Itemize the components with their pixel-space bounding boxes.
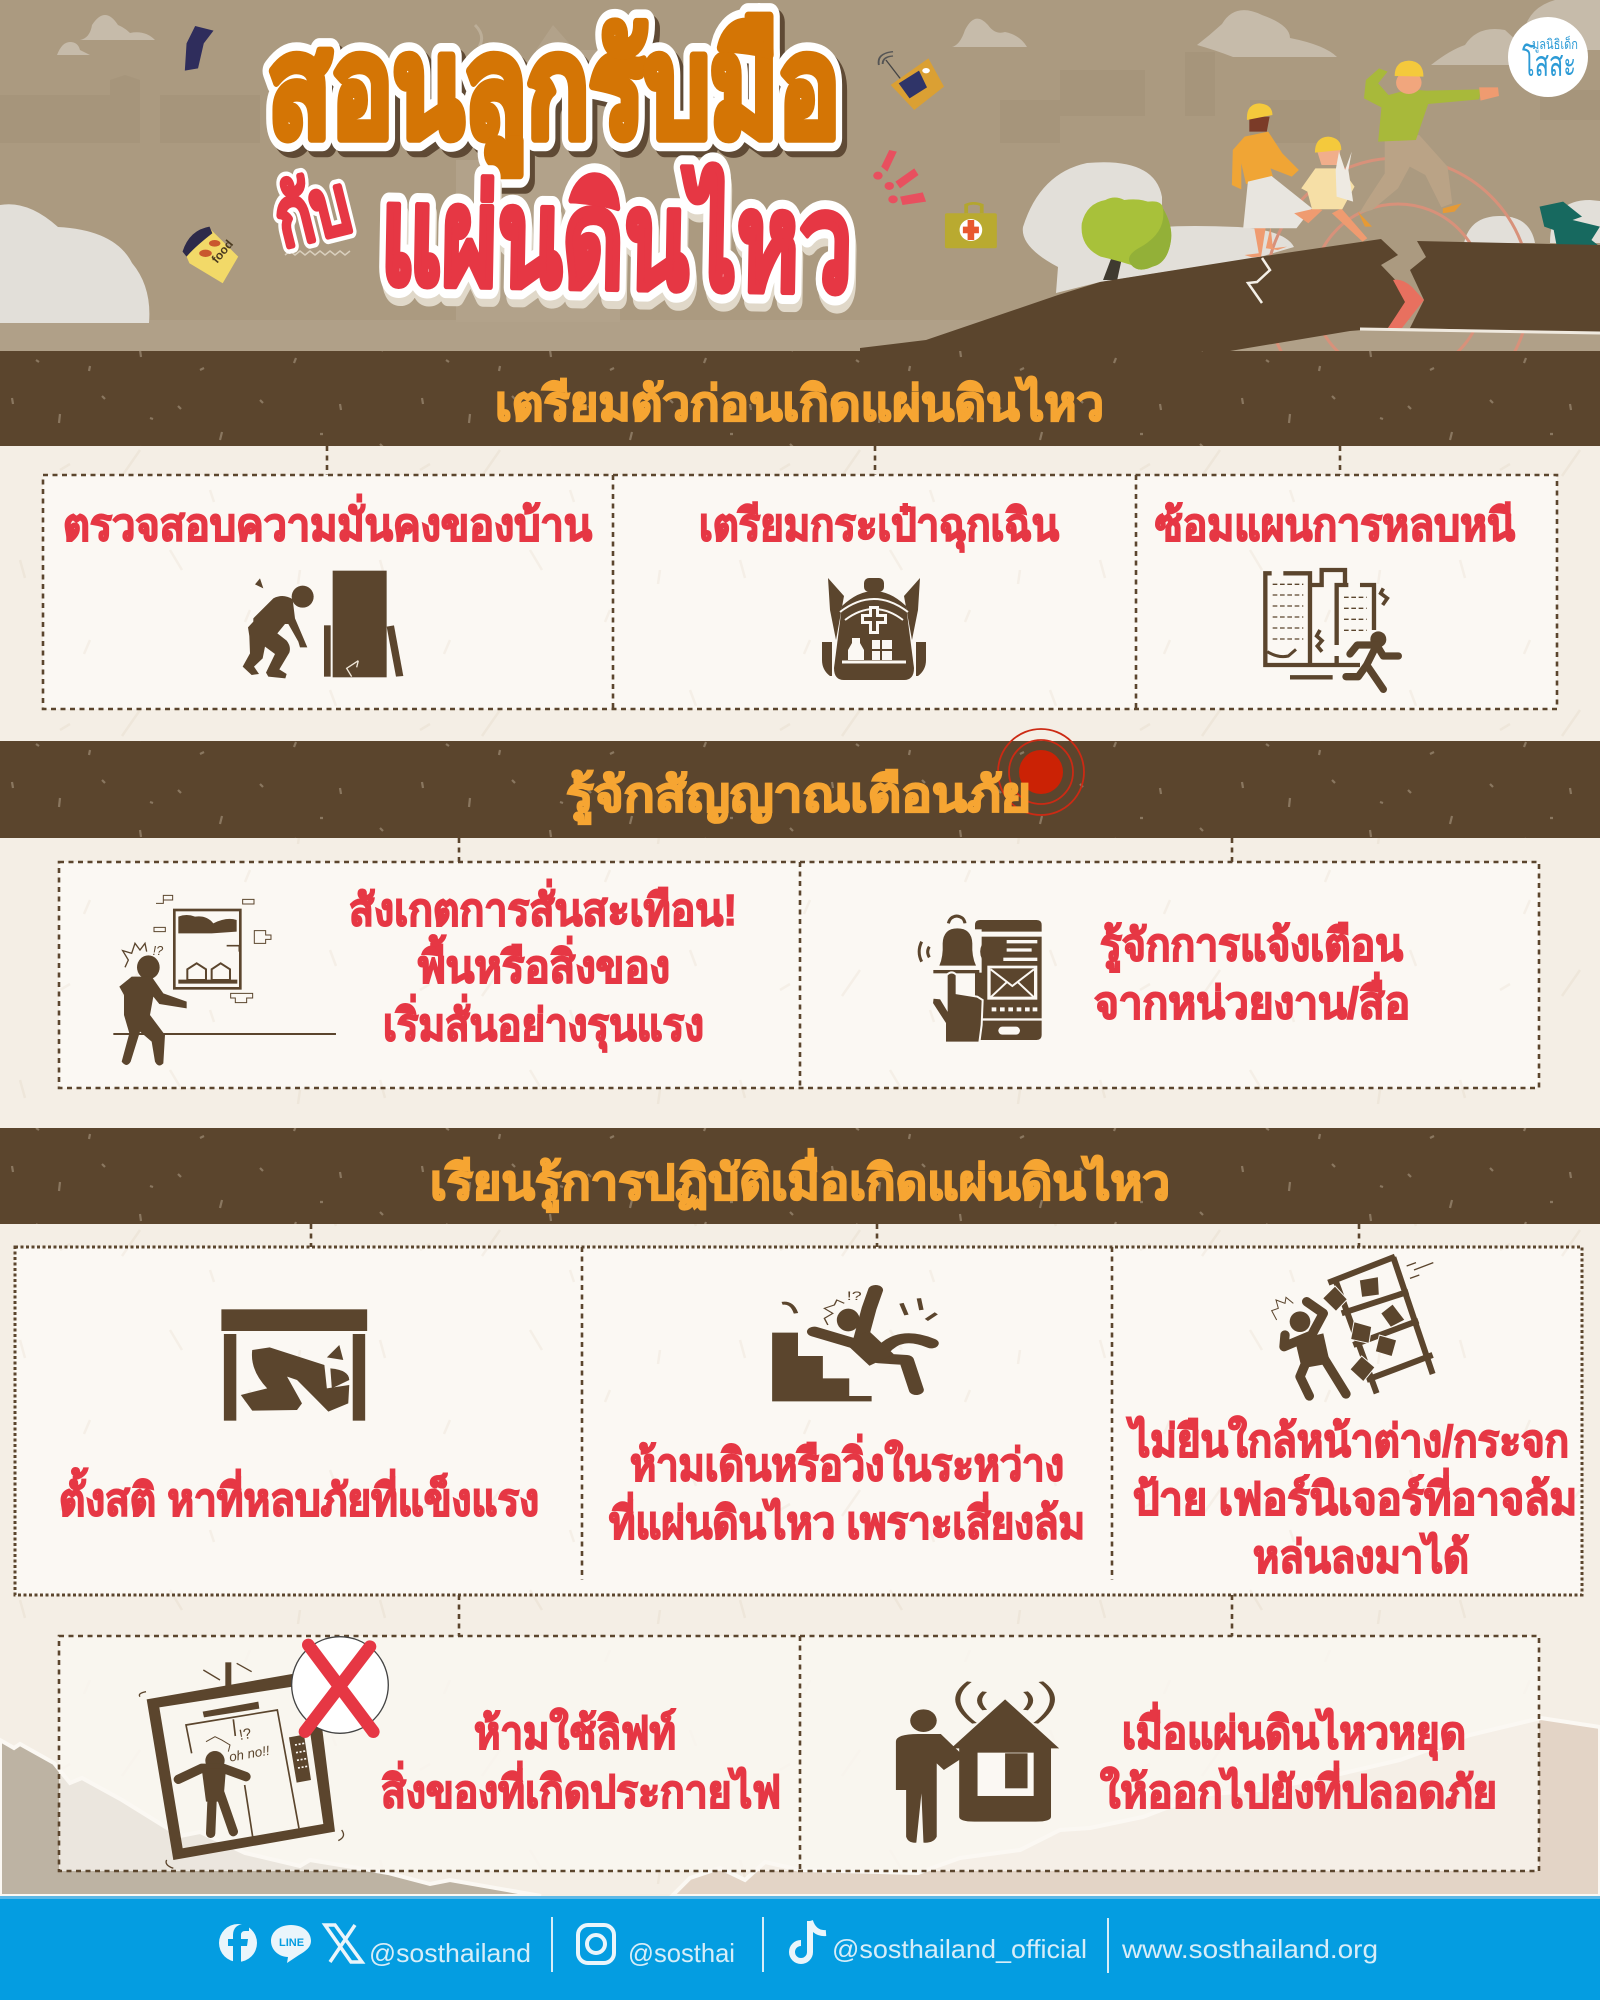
text: do not run: ที่แผ่นดินไหว เพราะเสี่ยงล้ม [609, 1492, 1085, 1548]
flashlight [185, 26, 214, 71]
logo [1508, 17, 1588, 97]
shock rings [1266, 158, 1530, 422]
icon: emergency backpack [822, 578, 926, 680]
white ground crack [1248, 258, 1270, 303]
title line 2: แผ่นดินไหว [379, 158, 854, 320]
distant house [456, 25, 620, 322]
text: take shelter: ตั้งสติ หาที่หลบภัยที่แข็งแรง [59, 1467, 539, 1525]
icon: tiktok [792, 1921, 826, 1961]
distant city silhouette [0, 52, 1600, 143]
footer [0, 1896, 1600, 2000]
band 3 heading [0, 1128, 1600, 1224]
mother [1232, 103, 1312, 257]
text: notice shaking: สังเกตการสั่นสะเทือน! [349, 879, 737, 935]
title line 1: สอนลูกรับมือ [268, 9, 840, 175]
icon: phone alert with bell [919, 916, 1042, 1043]
big pale clouds [0, 162, 1600, 323]
torn paper: lower left [0, 1740, 541, 1896]
exclamation marks [873, 150, 926, 205]
text: drill: ซ้อมแผนการหลบหนี [1155, 501, 1515, 550]
handle: sosthailand: @sosthailand [369, 1938, 531, 1968]
band 2 heading [0, 741, 1600, 838]
torn paper: lower right [672, 1718, 1600, 1896]
title line 1: สอนลูกรับมือ [273, 15, 845, 181]
handle: sosthai: @sosthai [628, 1938, 735, 1968]
icon: person watching shaking window: !? [153, 944, 163, 958]
food can [183, 227, 238, 283]
panel: warning signs [59, 838, 1539, 1088]
text: no elevator: ห้ามใช้ลิฟท์ [474, 1707, 676, 1758]
icon: elevator with red cross [139, 1637, 388, 1868]
child with bunny [1294, 137, 1367, 242]
warning dot [998, 729, 1084, 815]
title line 2: แผ่นดินไหว [379, 158, 854, 320]
text: notice shaking: เริ่มสั่นอย่างรุนแรง [383, 994, 704, 1053]
icon: buildings and running man [1265, 570, 1398, 689]
text: stay away [1126, 1415, 1577, 1582]
panel: what to do [15, 1224, 1582, 1637]
icon: facebook [219, 1924, 257, 1962]
text: emergency bag: เตรียมกระเป๋าฉุกเฉิน [699, 501, 1059, 553]
text: go to safe place [1100, 1702, 1497, 1817]
text: do not run [609, 1434, 1085, 1548]
icon: person watching shaking window [113, 895, 336, 1065]
smoke [475, 12, 612, 50]
band 3 heading: เรียนรู้การปฏิบัติเมื่อเกิดแผ่นดินไหว [430, 1148, 1170, 1213]
text: check the house: ตรวจสอบความมั่นคงของบ้าน [63, 494, 592, 550]
ground [860, 239, 1406, 351]
band 1 heading: เตรียมตัวก่อนเกิดแผ่นดินไหว [495, 375, 1104, 431]
icon: line: LINE [279, 1937, 304, 1949]
icon: person checking cracked wall [243, 571, 403, 678]
title word: with: กับ [265, 159, 359, 265]
text: no elevator [381, 1707, 781, 1817]
title word: with: กับ [265, 159, 359, 265]
crack glow [1388, 280, 1424, 328]
icon: person falling on stairs [772, 1290, 936, 1401]
icon: person under table [221, 1309, 367, 1421]
first aid kit [945, 203, 997, 248]
distant clouds [57, 0, 1600, 65]
icon: x [325, 1925, 362, 1962]
heading: warning signs: รู้จักสัญญาณเตือนภัย [566, 769, 1031, 825]
website: www.sosthailand.org [1121, 1934, 1378, 1964]
text: stay away: หล่นลงมาได้ [1253, 1531, 1469, 1582]
zigzag [285, 251, 350, 255]
text: no elevator: สิ่งของที่เกิดประกายไฟ [381, 1761, 781, 1817]
text: know alerts: จากหน่วยงาน/สื่อ [1094, 972, 1410, 1028]
radio [879, 52, 944, 110]
icon: person and falling shelf [1272, 1257, 1433, 1396]
text: do not run: ห้ามเดินหรือวิ่งในระหว่าง [630, 1434, 1064, 1490]
panel: after shaking [59, 1636, 1539, 1871]
icon: instagram [578, 1925, 614, 1963]
title line 1 [268, 9, 845, 181]
text: stay away: ไม่ยืนใกล้หน้าต่าง/กระจก [1126, 1415, 1569, 1466]
icon: person falling on stairs: !? [847, 1290, 862, 1303]
icon: elevator with red cross: !? [238, 1726, 253, 1744]
icon: line [271, 1925, 311, 1963]
title line 1: สอนลูกรับมือ [268, 9, 840, 175]
text: notice shaking: พื้นหรือสิ่งของ [418, 934, 670, 992]
header scene [0, 0, 1600, 422]
icon: elevator with red cross: oh no!! [228, 1743, 271, 1765]
text: go to safe place: ให้ออกไปยังที่ปลอดภัย [1100, 1761, 1497, 1817]
handle: tiktok: @sosthailand_official [832, 1934, 1087, 1964]
text: know alerts: รู้จักการแจ้งเตือน [1100, 921, 1403, 972]
pine tree [1540, 202, 1600, 273]
title line 2 [379, 158, 856, 329]
text: notice shaking [349, 879, 737, 1053]
tree [1082, 197, 1171, 280]
logo: มูลนิธิเด็ก [1532, 35, 1578, 53]
panel: prepare [43, 446, 1557, 709]
text: know alerts [1094, 921, 1410, 1028]
icon: person leaving shaking house [896, 1682, 1059, 1843]
title line 2: แผ่นดินไหว [381, 167, 856, 329]
text: stay away: ป้าย เฟอร์นิเจอร์ที่อาจล้ม [1133, 1468, 1577, 1524]
band 1 heading [0, 351, 1600, 446]
father [1358, 61, 1499, 227]
text: go to safe place: เมื่อแผ่นดินไหวหยุด [1122, 1702, 1466, 1761]
header scene: food [209, 237, 236, 266]
